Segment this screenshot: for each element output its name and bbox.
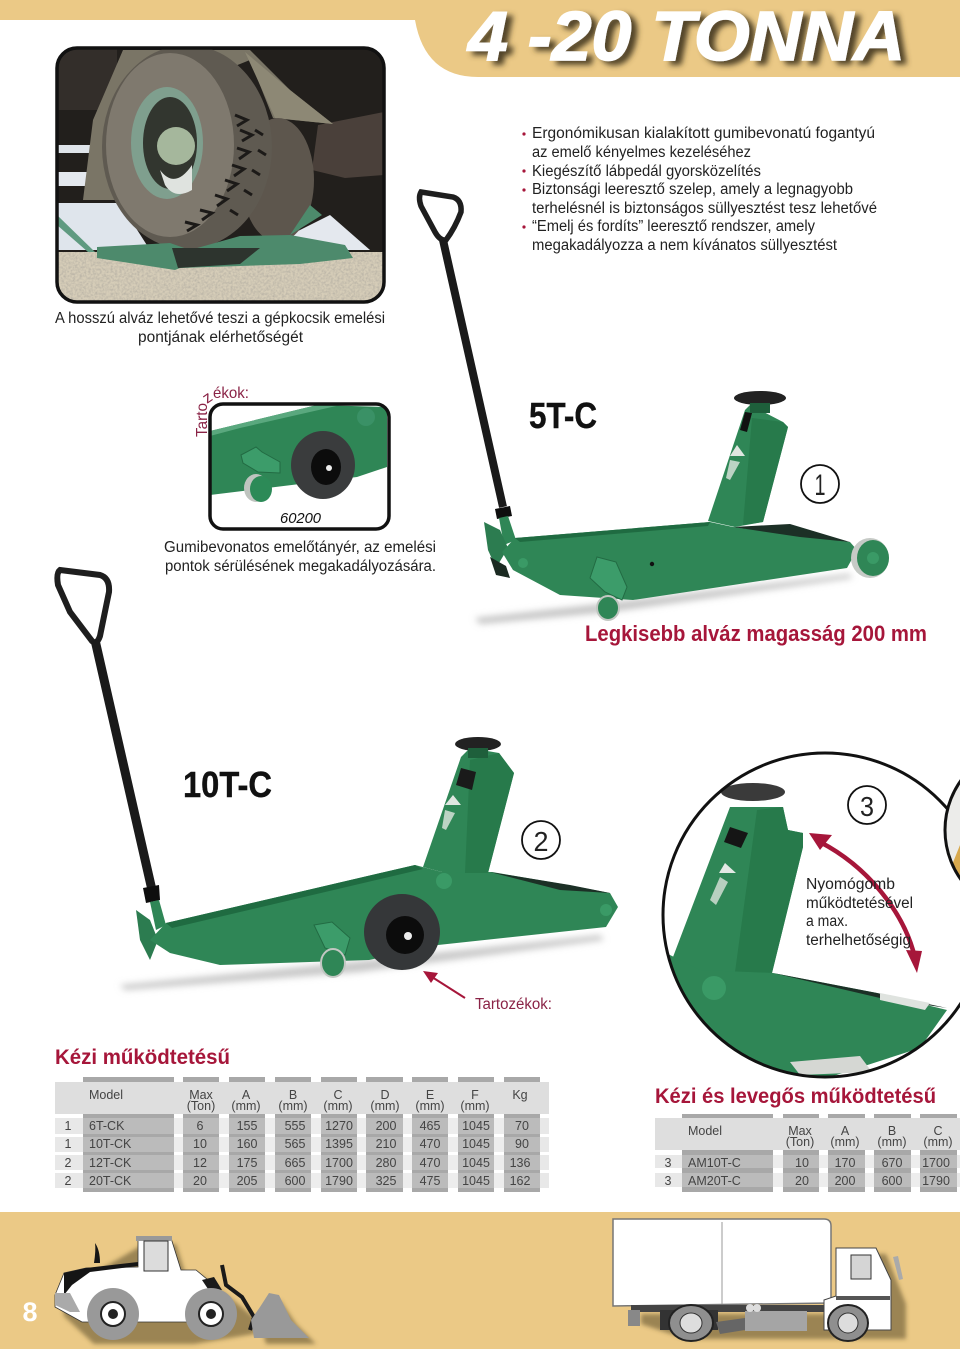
- table: manual models: 136: [510, 1156, 530, 1170]
- detail circle: release mechanism: [660, 753, 960, 1090]
- table: manual models: 1: [65, 1137, 72, 1151]
- curved accessories label: Tarto: [194, 403, 211, 437]
- table: manual models: (mm): [370, 1099, 400, 1113]
- table: manual models: 325: [376, 1174, 396, 1188]
- heading: manual table: Kézi működtetésű: [55, 1046, 230, 1069]
- table: manual models: Kg: [512, 1088, 528, 1102]
- table: manual models: 6: [197, 1119, 204, 1133]
- table: manual models: 12T-CK: [89, 1156, 132, 1170]
- table: manual models: 555: [285, 1119, 305, 1133]
- table: manual models: 12: [193, 1156, 207, 1170]
- table: manual models: 465: [420, 1119, 440, 1133]
- table: manual models: 175: [237, 1156, 257, 1170]
- feature list: Biztonsági leeresztő szelep, amely a legnagyobb: [532, 181, 853, 198]
- page number: 8: [22, 1297, 38, 1327]
- table: manual models: B: [289, 1088, 297, 1102]
- table: manual and pneumatic models: AM20T-C: [688, 1174, 741, 1188]
- top header band: [0, 0, 960, 77]
- table: manual and pneumatic models: 3: [665, 1174, 672, 1188]
- table: manual models: Model: [89, 1088, 123, 1102]
- table: manual and pneumatic models: (mm): [830, 1135, 860, 1149]
- table: manual models: (Ton): [187, 1099, 215, 1113]
- table: manual and pneumatic models: 600: [882, 1174, 902, 1188]
- table: manual and pneumatic models: 3: [665, 1156, 672, 1170]
- icon: wheel loader: [55, 1236, 316, 1344]
- footer band: [0, 1212, 960, 1349]
- table: manual and pneumatic models: 1790: [922, 1174, 950, 1188]
- table: manual models: 210: [376, 1137, 396, 1151]
- feature list: [522, 125, 877, 254]
- accessory description: [164, 539, 436, 575]
- feature list: az emelő kényelmes kezeléséhez: [532, 144, 751, 161]
- accessory code: 60200: [280, 510, 322, 527]
- model name 5T-C: 5T-C: [529, 395, 597, 436]
- detail circle note: a max.: [806, 913, 848, 930]
- table: manual models: 1045: [462, 1174, 490, 1188]
- table: manual models: 600: [285, 1174, 305, 1188]
- table: manual models: 10T-CK: [89, 1137, 132, 1151]
- feature list: megakadályozza a nem kívánatos süllyesztést: [532, 237, 838, 254]
- table: manual models: 70: [515, 1119, 529, 1133]
- accessory description: pontok sérülésének megakadályozására.: [165, 558, 436, 575]
- curved accessories label: z: [200, 389, 216, 407]
- photo caption: [55, 310, 385, 346]
- table: manual models: 2: [65, 1156, 72, 1170]
- table: manual and pneumatic models: 170: [835, 1156, 855, 1170]
- icon: box truck: [613, 1219, 906, 1341]
- table: manual models: 1045: [462, 1137, 490, 1151]
- table: manual models: 280: [376, 1156, 396, 1170]
- number badge 3: 3: [860, 791, 874, 822]
- red curved double arrow: [809, 833, 922, 973]
- table: manual models: 1700: [325, 1156, 353, 1170]
- table: manual and pneumatic models: 10: [795, 1156, 809, 1170]
- table: manual models: 10: [193, 1137, 207, 1151]
- table: manual and pneumatic models: 1700: [922, 1156, 950, 1170]
- accessories label: Tartozékok:: [475, 996, 552, 1013]
- detail circle note: terhelhetőségig: [806, 932, 911, 949]
- table: manual models: (mm): [278, 1099, 308, 1113]
- table: manual and pneumatic models: Model: [688, 1124, 722, 1138]
- table: manual models: 6T-CK: [89, 1119, 125, 1133]
- table: manual models: 162: [510, 1174, 530, 1188]
- table: manual models: 665: [285, 1156, 305, 1170]
- feature list: “Emelj és fordíts” leeresztő rendszer, amely: [532, 218, 815, 235]
- feature list: Kiegészítő lábpedál gyorsközelítés: [532, 163, 761, 180]
- table: manual and pneumatic models: (mm): [877, 1135, 907, 1149]
- table: manual models: (mm): [323, 1099, 353, 1113]
- table: manual models: 160: [237, 1137, 257, 1151]
- number badge 2: [522, 821, 560, 859]
- photo caption: pontjának elérhetőségét: [138, 329, 304, 346]
- table: manual models: 470: [420, 1156, 440, 1170]
- curved accessories label: ékok:: [213, 385, 249, 402]
- table: manual models: 20T-CK: [89, 1174, 132, 1188]
- table: manual and pneumatic models: C: [933, 1124, 943, 1138]
- number badge 3: [848, 786, 886, 824]
- accessory description: Gumibevonatos emelőtányér, az emelési: [164, 539, 436, 556]
- table: manual models: (mm): [415, 1099, 445, 1113]
- table: manual and pneumatic models: AM10T-C: [688, 1156, 741, 1170]
- arrow to accessory wheel: [423, 971, 465, 998]
- table: manual models: 475: [420, 1174, 440, 1188]
- table: manual models: E: [426, 1088, 434, 1102]
- table: manual models: C: [333, 1088, 343, 1102]
- table: manual models: 1395: [325, 1137, 353, 1151]
- table: manual models: 1790: [325, 1174, 353, 1188]
- table: manual models: F: [471, 1088, 479, 1102]
- table: manual models: 155: [237, 1119, 257, 1133]
- photo: jack under truck wheel: [57, 45, 384, 304]
- table: manual and pneumatic models: B: [888, 1124, 896, 1138]
- jack 10T-C: [57, 570, 618, 990]
- accessory box: wheel kit 60200: [210, 404, 389, 529]
- feature list: Ergonómikusan kialakított gumibevonatú fogantyú: [532, 125, 875, 142]
- table: manual models: A: [242, 1088, 251, 1102]
- table: manual models: 200: [376, 1119, 396, 1133]
- table: manual models: D: [380, 1088, 390, 1102]
- feature list: terhelésnél is biztonságos süllyesztést tesz lehetővé: [532, 200, 877, 217]
- heading: manual and pneumatic table: Kézi és levegős működtetésű: [655, 1085, 936, 1108]
- table: manual models: 1270: [325, 1119, 353, 1133]
- minimum chassis height note: Legkisebb alváz magasság 200 mm: [585, 621, 927, 646]
- table: manual and pneumatic models: 670: [882, 1156, 902, 1170]
- table: manual models: Max: [189, 1088, 214, 1102]
- number badge 2: 2: [534, 826, 548, 857]
- table: manual models: (mm): [460, 1099, 490, 1113]
- detail circle note: működtetésével: [806, 895, 913, 912]
- photo caption: A hosszú alváz lehetővé teszi a gépkocsik emelési: [55, 310, 385, 327]
- table: manual models: [55, 1077, 549, 1192]
- curved accessories label: [194, 385, 249, 437]
- table: manual and pneumatic models: A: [841, 1124, 850, 1138]
- detail circle note: Nyomógomb: [806, 876, 895, 893]
- table: manual and pneumatic models: (mm): [923, 1135, 953, 1149]
- table: manual models: 205: [237, 1174, 257, 1188]
- number badge 1: [801, 465, 839, 503]
- jack 5T-C: [420, 192, 889, 624]
- table: manual and pneumatic models: (Ton): [786, 1135, 814, 1149]
- table: manual models: 565: [285, 1137, 305, 1151]
- number badge 1: 1: [814, 469, 826, 502]
- table: manual models: (mm): [231, 1099, 261, 1113]
- side detail circle: [944, 779, 960, 881]
- model name 10T-C: 10T-C: [183, 764, 272, 805]
- table: manual models: 470: [420, 1137, 440, 1151]
- table: manual and pneumatic models: [655, 1114, 960, 1192]
- table: manual models: 1045: [462, 1156, 490, 1170]
- table: manual models: 90: [515, 1137, 529, 1151]
- table: manual and pneumatic models: Max: [788, 1124, 813, 1138]
- table: manual models: 2: [65, 1174, 72, 1188]
- table: manual models: 1045: [462, 1119, 490, 1133]
- detail circle note: [806, 876, 913, 949]
- table: manual and pneumatic models: 20: [795, 1174, 809, 1188]
- table: manual models: 20: [193, 1174, 207, 1188]
- table: manual models: 1: [65, 1119, 72, 1133]
- table: manual and pneumatic models: 200: [835, 1174, 855, 1188]
